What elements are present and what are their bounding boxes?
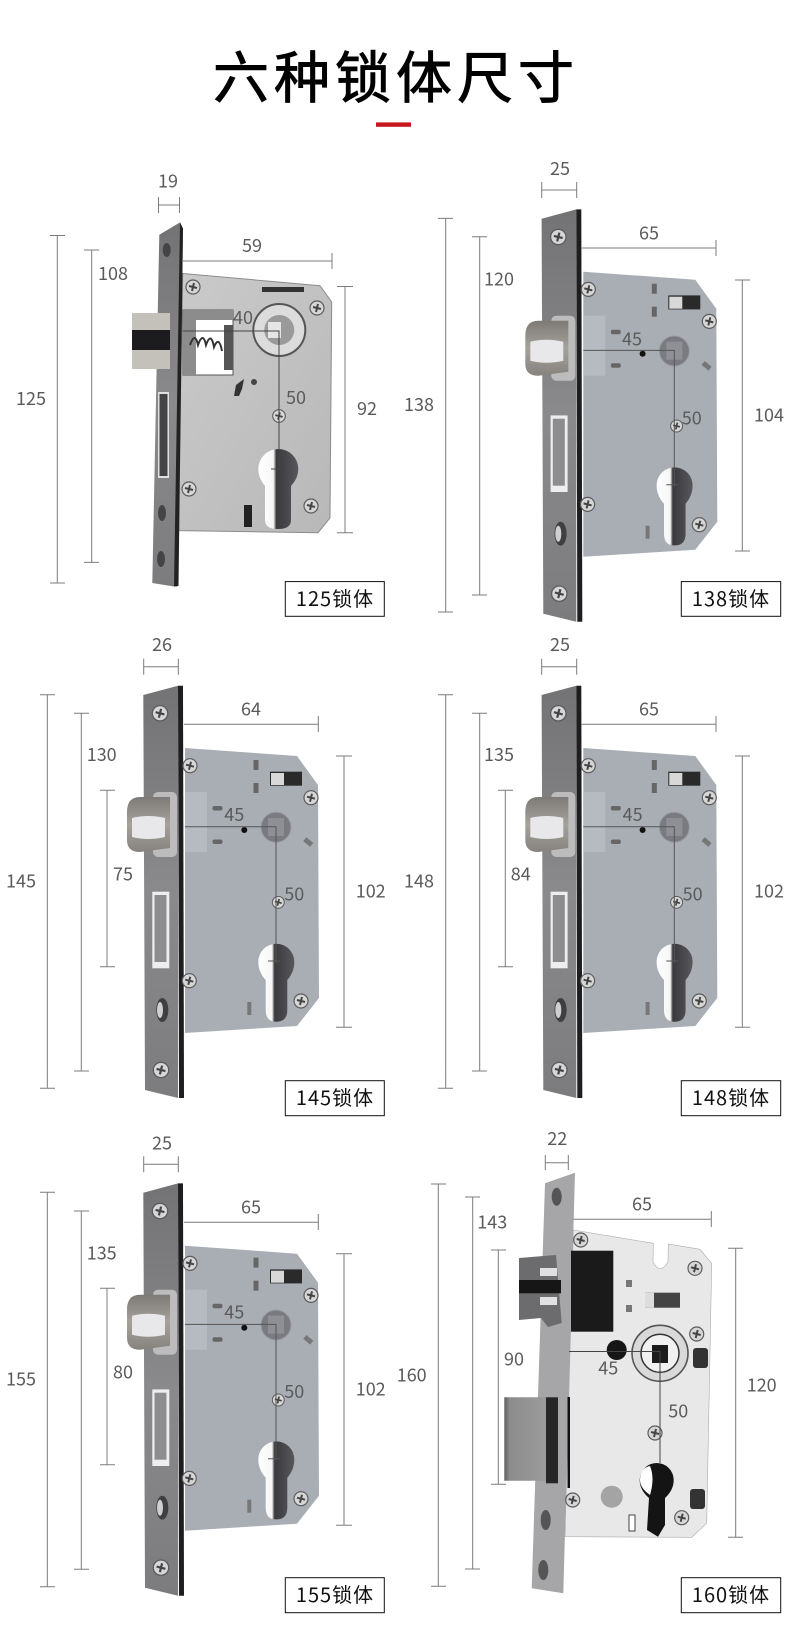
dimension labels: 102: [356, 1375, 386, 1401]
label box: 160: [681, 1578, 781, 1613]
label box: 148: 148锁体: [692, 1082, 770, 1111]
dimension labels: 50: [682, 404, 702, 430]
dimension lines: [40, 659, 352, 1088]
dimension labels: 138: [404, 391, 434, 417]
lock body image: 125: [132, 222, 332, 586]
label box: 138: 138锁体: [692, 583, 770, 612]
dimension labels: 143: [477, 1208, 507, 1234]
title accent bar: [376, 122, 411, 127]
dimension labels: 50: [668, 1398, 688, 1424]
dimension labels: 40: [233, 304, 253, 330]
panel: 145 lock: [6, 631, 386, 1116]
label box: 148: [681, 1081, 781, 1116]
dimension labels: 45: [224, 801, 244, 827]
dimension labels: [6, 1130, 386, 1404]
lock body image: 148: [525, 686, 717, 1098]
dimension labels: 155: [6, 1365, 36, 1391]
dimension labels: 84: [511, 861, 531, 887]
dimension lines: [50, 197, 353, 583]
label box: 160: 160锁体: [692, 1579, 770, 1608]
dimension labels: 102: [754, 878, 784, 904]
dimension lines: [431, 1155, 743, 1586]
dimension labels: 102: [356, 878, 386, 904]
panel: 138 lock: [404, 155, 784, 622]
dimension labels: [404, 631, 784, 906]
dimension lines: [438, 182, 750, 612]
dimension labels: 19: [158, 168, 178, 194]
label box: 145: 145锁体: [296, 1082, 374, 1111]
dimension labels: 130: [87, 741, 117, 767]
dimension labels: 45: [622, 326, 642, 352]
dimension labels: 65: [639, 695, 659, 721]
dimension labels: 45: [623, 801, 643, 827]
dimension labels: 50: [284, 1378, 304, 1404]
dimension lines: [40, 1156, 352, 1587]
dimension labels: 120: [484, 266, 514, 292]
dimension labels: 125: [16, 385, 46, 411]
dimension labels: [397, 1125, 777, 1424]
dimension labels: 45: [224, 1299, 244, 1325]
dimension labels: [6, 631, 386, 906]
dimension labels: 26: [152, 631, 172, 657]
lock body image: 138: [525, 209, 717, 622]
dimension labels: [404, 155, 784, 430]
lock body image: 160: [504, 1173, 712, 1593]
dimension labels: 80: [113, 1359, 133, 1385]
dimension labels: 50: [683, 880, 703, 906]
dimension lines: [438, 659, 750, 1088]
title: 六种锁体尺寸: [213, 34, 579, 115]
dimension labels: 104: [754, 402, 784, 428]
dimension labels: 92: [357, 395, 377, 421]
dimension labels: 50: [286, 384, 306, 410]
label box: 145: [285, 1081, 384, 1116]
panel: 125 lock: [16, 168, 384, 616]
panel: 160 lock: [397, 1125, 781, 1613]
dimension labels: 148: [404, 868, 434, 894]
dimension labels: 65: [639, 220, 659, 246]
panel: 148 lock: [404, 631, 784, 1116]
dimension labels: 160: [397, 1362, 427, 1388]
label box: 125: [285, 582, 384, 616]
dimension labels: 65: [241, 1193, 261, 1219]
dimension labels: [16, 168, 377, 421]
label box: 125: 125锁体: [296, 583, 374, 612]
dimension labels: 120: [747, 1372, 777, 1398]
lock body image: 145: [127, 686, 319, 1098]
lock body image: 155: [127, 1183, 319, 1596]
dimension labels: 75: [113, 861, 133, 887]
dimension labels: 50: [284, 880, 304, 906]
label box: 155: 155锁体: [296, 1579, 374, 1608]
dimension labels: 65: [632, 1190, 652, 1216]
label box: 138: [681, 582, 781, 616]
dimension labels: 25: [550, 631, 570, 657]
dimension labels: 90: [504, 1345, 524, 1371]
dimension labels: 59: [242, 232, 262, 258]
dimension labels: 45: [598, 1354, 618, 1380]
dimension labels: 25: [152, 1130, 172, 1156]
label box: 155: [285, 1578, 384, 1613]
dimension labels: 22: [547, 1125, 567, 1151]
dimension labels: 135: [484, 741, 514, 767]
dimension labels: 145: [6, 868, 36, 894]
dimension labels: 25: [550, 155, 570, 181]
dimension labels: 108: [98, 260, 128, 286]
dimension labels: 64: [241, 695, 261, 721]
dimension labels: 135: [87, 1239, 117, 1265]
panel: 155 lock: [6, 1130, 386, 1613]
